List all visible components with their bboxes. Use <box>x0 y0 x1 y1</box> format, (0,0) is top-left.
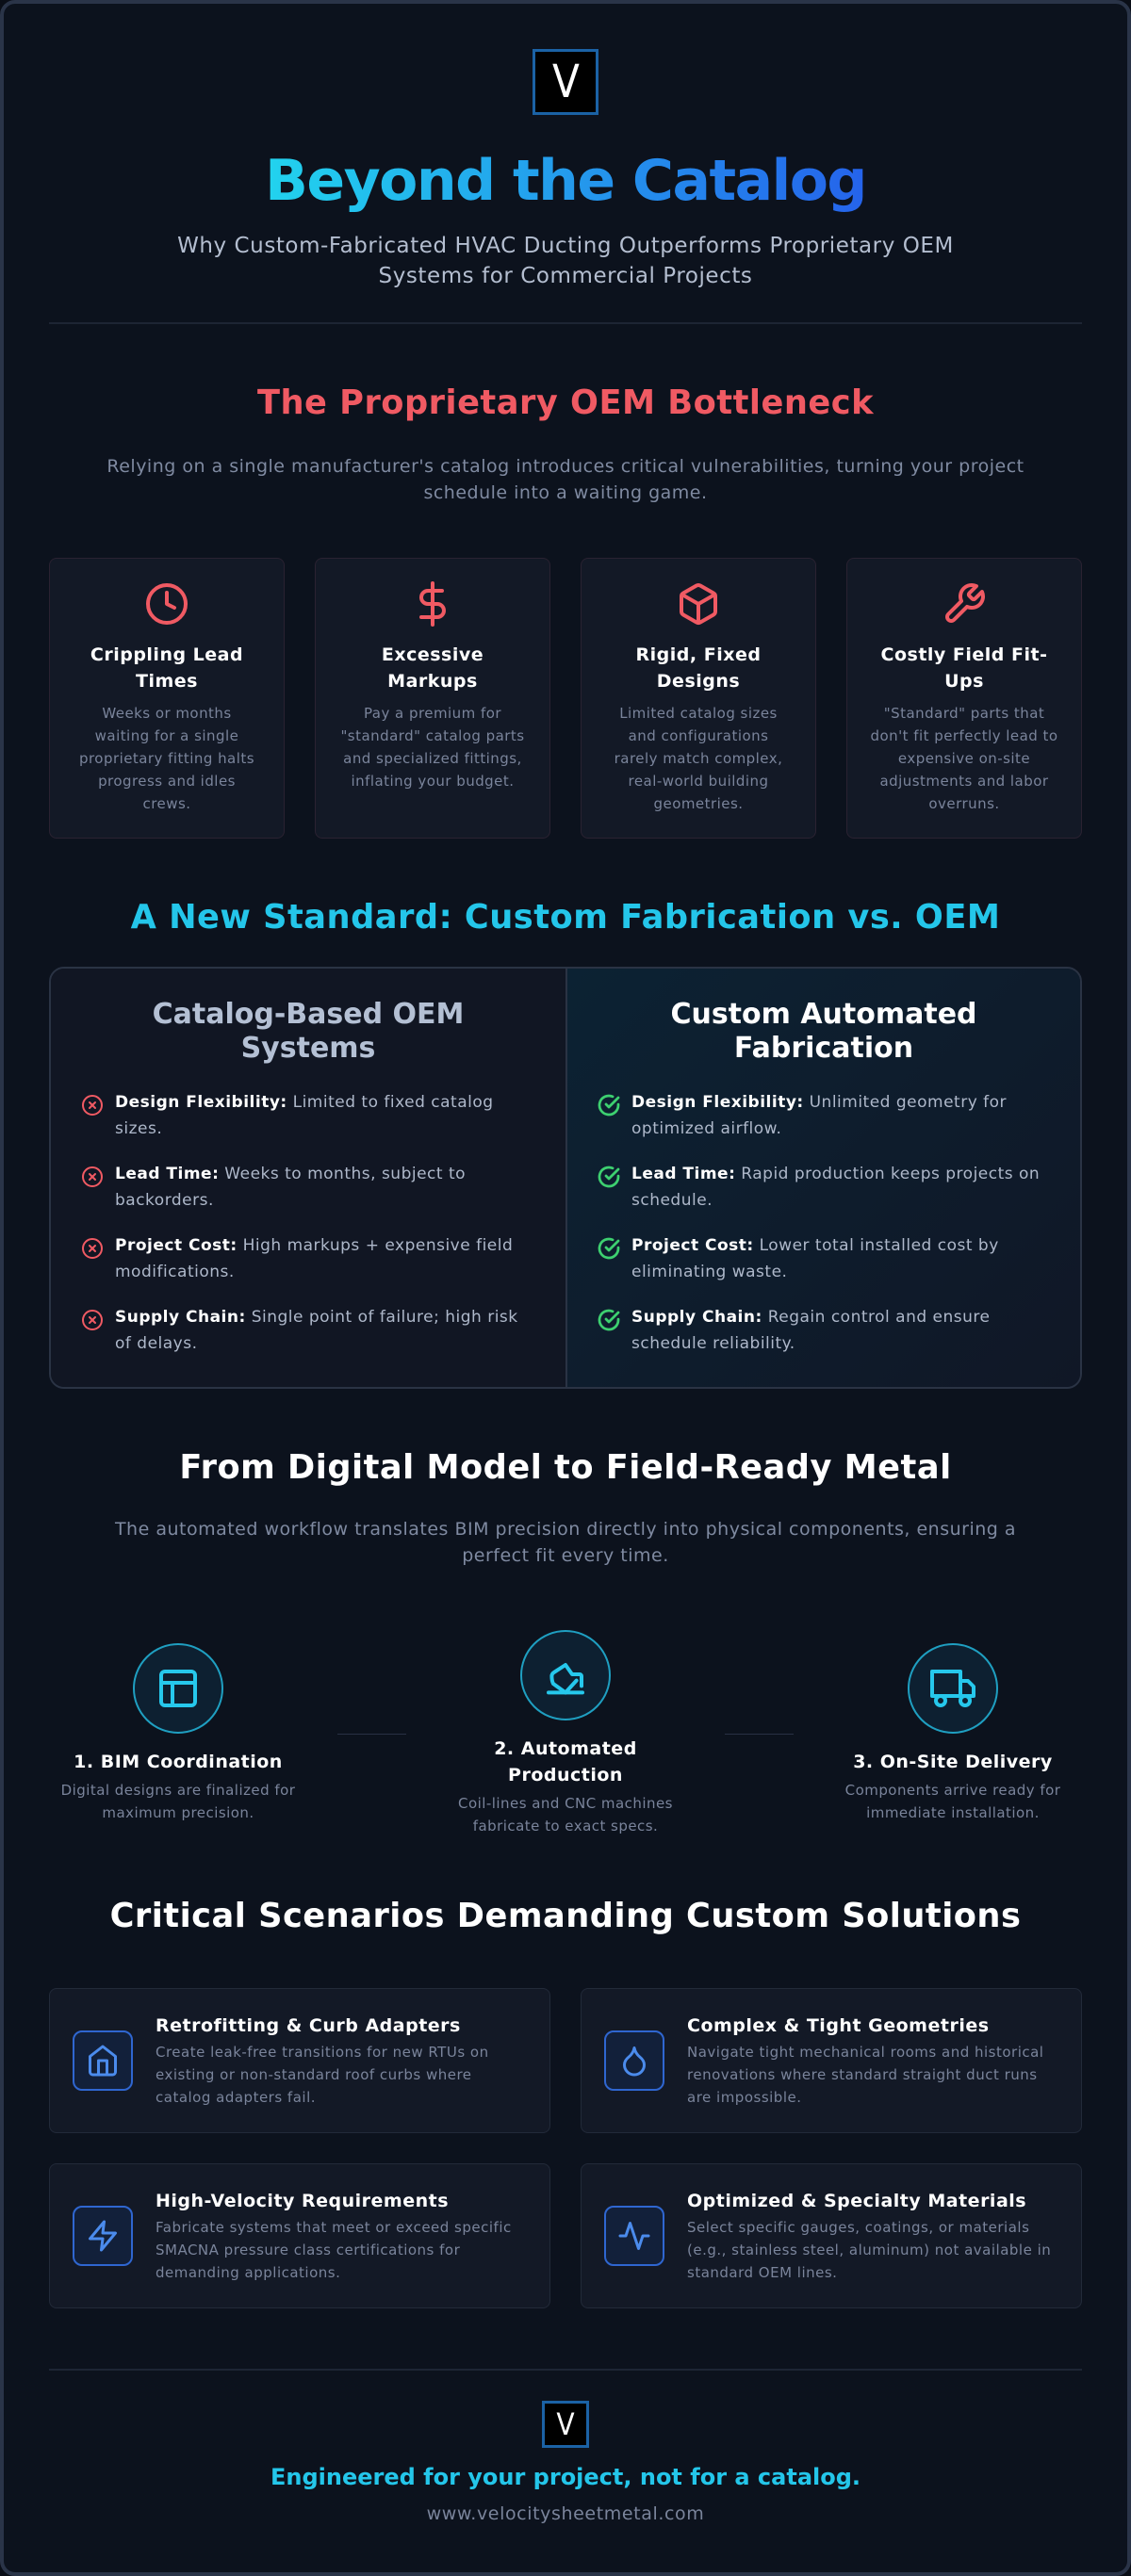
panel: catalog-based OEM systems <box>51 969 566 1387</box>
column heading: Custom Automated <box>670 998 977 1031</box>
icon: layout <box>133 1643 223 1734</box>
card title: Markups <box>387 671 478 692</box>
subtitle: Why Custom-Fabricated HVAC Ducting Outperforms Proprietary OEM <box>177 234 954 258</box>
section intro: bottleneck: schedule into a waiting game. <box>423 482 708 503</box>
heading: critical scenarios: Critical Scenarios Demanding Custom Solutions <box>110 1897 1021 1935</box>
comparison row: lead time: schedule. <box>631 1191 713 1210</box>
card title: Excessive <box>382 644 484 665</box>
section intro: workflow <box>115 1519 1016 1566</box>
section intro: workflow: perfect fit every time. <box>462 1545 669 1566</box>
step description: Digital designs are finalized for <box>61 1782 295 1799</box>
scenario text: catalog adapters fail. <box>156 2089 316 2106</box>
column heading: Catalog-Based OEM <box>153 998 464 1031</box>
column heading <box>670 998 977 1065</box>
card title <box>636 644 761 692</box>
card description: Weeks or months <box>102 705 232 722</box>
card description <box>870 705 1058 812</box>
card description: and specialized fittings, <box>343 750 522 767</box>
section intro: bottleneck: Relying on a single manufacturer's catalog introduces critical vulnerabilities, turning your project <box>107 456 1024 477</box>
step description <box>61 1782 295 1821</box>
comparison row: project cost: Project Cost: Lower total installed cost by <box>631 1236 999 1255</box>
column heading: Systems <box>241 1032 375 1065</box>
arrow: connector 2 to 3 <box>725 1734 794 1735</box>
card title <box>90 644 243 692</box>
scenario text <box>687 2191 1051 2281</box>
card description: geometries. <box>654 795 743 812</box>
comparison row: lead time: backorders. <box>115 1191 214 1210</box>
scenario text: Retrofitting & Curb Adapters <box>156 2015 461 2036</box>
subtitle: Systems for Commercial Projects <box>379 264 752 288</box>
panel: retrofitting and curb adapters <box>49 1988 550 2133</box>
icon: box <box>680 583 717 626</box>
step description <box>845 1782 1060 1821</box>
arrow: connector 1 to 2 <box>337 1734 406 1735</box>
card title: Times <box>136 671 198 692</box>
card description <box>615 705 782 812</box>
icon: truck <box>908 1643 998 1734</box>
scenario text: demanding applications. <box>156 2264 340 2281</box>
card title: Ups <box>944 671 984 692</box>
card title: Crippling Lead <box>90 644 243 665</box>
panel: complex and tight geometries <box>581 1988 1082 2133</box>
icon: droplet <box>604 2030 664 2091</box>
logo: V <box>552 56 579 108</box>
scenario text: Fabricate systems that meet or exceed specific <box>156 2219 512 2236</box>
icon: production <box>520 1630 611 1720</box>
section intro: bottleneck <box>107 456 1024 503</box>
card description: adjustments and labor <box>880 773 1048 790</box>
card description: expensive on-site <box>898 750 1030 767</box>
card description: real-world building <box>629 773 768 790</box>
scenario text: Select specific gauges, coatings, or materials <box>687 2219 1029 2236</box>
title: Beyond the Catalog <box>265 148 866 214</box>
icon: home <box>73 2030 133 2091</box>
comparison row: supply chain <box>82 1308 518 1353</box>
step description: Components arrive ready for <box>845 1782 1060 1799</box>
card description <box>79 705 254 812</box>
footer website: www.velocitysheetmetal.com <box>427 2503 704 2524</box>
comparison row: design flexibility: sizes. <box>115 1119 162 1138</box>
card description <box>340 705 525 790</box>
icon: lightning bolt <box>73 2206 133 2266</box>
comparison row: supply chain: Supply Chain: Single point of failure; high risk <box>115 1308 518 1327</box>
card description: "Standard" parts that <box>884 705 1044 722</box>
footer logo <box>542 2401 589 2448</box>
panel: crippling lead times <box>49 558 285 839</box>
comparison row: lead time: Lead Time: Weeks to months, subject to <box>115 1165 466 1183</box>
comparison row: design flexibility: Design Flexibility: Unlimited geometry for <box>631 1093 1007 1112</box>
card description: crews. <box>143 795 190 812</box>
scenario text: (e.g., stainless steel, aluminum) not available in <box>687 2242 1051 2258</box>
step description: fabricate to exact specs. <box>473 1818 658 1834</box>
icon: activity <box>604 2206 664 2266</box>
comparison row: project cost: modifications. <box>115 1263 235 1281</box>
panel: high-velocity requirements <box>49 2163 550 2308</box>
card title: Costly Field Fit- <box>881 644 1047 665</box>
section intro: workflow: The automated workflow translates BIM precision directly into physical components, ensuring a <box>115 1519 1016 1540</box>
icon: wrench <box>945 583 985 623</box>
comparison row: supply chain: of delays. <box>115 1334 198 1353</box>
panel: rigid fixed designs <box>581 558 816 839</box>
step title: 3. On-Site Delivery <box>853 1752 1053 1772</box>
step title <box>494 1738 637 1785</box>
card description: Limited catalog sizes <box>619 705 778 722</box>
subtitle <box>177 234 954 288</box>
panel: excessive markups <box>315 558 550 839</box>
comparison row: supply chain: schedule reliability. <box>631 1334 795 1353</box>
card description: don't fit perfectly lead to <box>870 727 1058 744</box>
step description <box>458 1795 673 1834</box>
footer tagline: Engineered for your project, not for a catalog. <box>270 2464 861 2490</box>
comparison row: design flexibility <box>598 1093 1007 1138</box>
step title: Production <box>508 1765 623 1785</box>
card title <box>881 644 1047 692</box>
scenario text: renovations where standard straight duct runs <box>687 2066 1038 2083</box>
step description: maximum precision. <box>102 1804 254 1821</box>
card title: Designs <box>657 671 740 692</box>
comparison table <box>49 967 1082 1389</box>
scenario text: Optimized & Specialty Materials <box>687 2191 1026 2211</box>
step title: 2. Automated <box>494 1738 637 1759</box>
comparison row: project cost <box>82 1236 513 1281</box>
panel: optimized and specialty materials <box>581 2163 1082 2308</box>
scenario text <box>156 2015 489 2106</box>
panel: custom automated fabrication <box>566 969 1080 1387</box>
comparison row: lead time: Lead Time: Rapid production keeps projects on <box>631 1165 1040 1183</box>
column heading: Fabrication <box>734 1032 913 1065</box>
comparison row: design flexibility: optimized airflow. <box>631 1119 781 1138</box>
heading: the proprietary OEM bottleneck: The Proprietary OEM Bottleneck <box>257 383 874 422</box>
logo <box>533 49 598 115</box>
comparison row: design flexibility <box>82 1093 494 1138</box>
card title: Rigid, Fixed <box>636 644 761 665</box>
step description: immediate installation. <box>866 1804 1040 1821</box>
footer logo: V <box>556 2406 575 2442</box>
process step 3: on-site delivery <box>845 1643 1060 1821</box>
heading: from digital model to field-ready metal: From Digital Model to Field-Ready Metal <box>179 1448 952 1487</box>
heading: a new standard: A New Standard: Custom Fabrication vs. OEM <box>131 898 1000 937</box>
card description: inflating your budget. <box>352 773 514 790</box>
comparison row: supply chain <box>598 1308 990 1353</box>
icon: clock <box>146 583 188 625</box>
scenario text: Complex & Tight Geometries <box>687 2015 990 2036</box>
card description: progress and idles <box>98 773 236 790</box>
step title: 1. BIM Coordination <box>74 1752 283 1772</box>
scenario text <box>156 2191 512 2281</box>
icon: dollar sign <box>419 581 446 627</box>
step description: Coil-lines and CNC machines <box>458 1795 673 1812</box>
card title <box>382 644 484 692</box>
comparison row: supply chain: Supply Chain: Regain control and ensure <box>631 1308 990 1327</box>
process step 1: BIM coordination <box>61 1643 295 1821</box>
card description: overruns. <box>928 795 1000 812</box>
scenario text: existing or non-standard roof curbs where <box>156 2066 472 2083</box>
card description: Pay a premium for <box>364 705 501 722</box>
scenario text <box>687 2015 1043 2106</box>
comparison row: design flexibility: Design Flexibility: Limited to fixed catalog <box>115 1093 494 1112</box>
scenario text: SMACNA pressure class certifications for <box>156 2242 460 2258</box>
comparison row: project cost <box>598 1236 999 1281</box>
scenario text: are impossible. <box>687 2089 801 2106</box>
comparison row: project cost: eliminating waste. <box>631 1263 787 1281</box>
scenario text: Create leak-free transitions for new RTUs on <box>156 2044 489 2061</box>
card description: "standard" catalog parts <box>340 727 525 744</box>
comparison row: project cost: Project Cost: High markups + expensive field <box>115 1236 513 1255</box>
comparison row: lead time <box>598 1165 1040 1210</box>
scenario text: Navigate tight mechanical rooms and historical <box>687 2044 1043 2061</box>
column heading <box>153 998 464 1065</box>
card description: waiting for a single <box>95 727 238 744</box>
scenario text: High-Velocity Requirements <box>156 2191 449 2211</box>
panel: costly field fit-ups <box>846 558 1082 839</box>
card description: and configurations <box>629 727 768 744</box>
card description: rarely match complex, <box>615 750 782 767</box>
scenario text: standard OEM lines. <box>687 2264 837 2281</box>
comparison row: lead time <box>82 1165 466 1210</box>
process step 2: automated production <box>458 1630 673 1834</box>
card description: proprietary fitting halts <box>79 750 254 767</box>
